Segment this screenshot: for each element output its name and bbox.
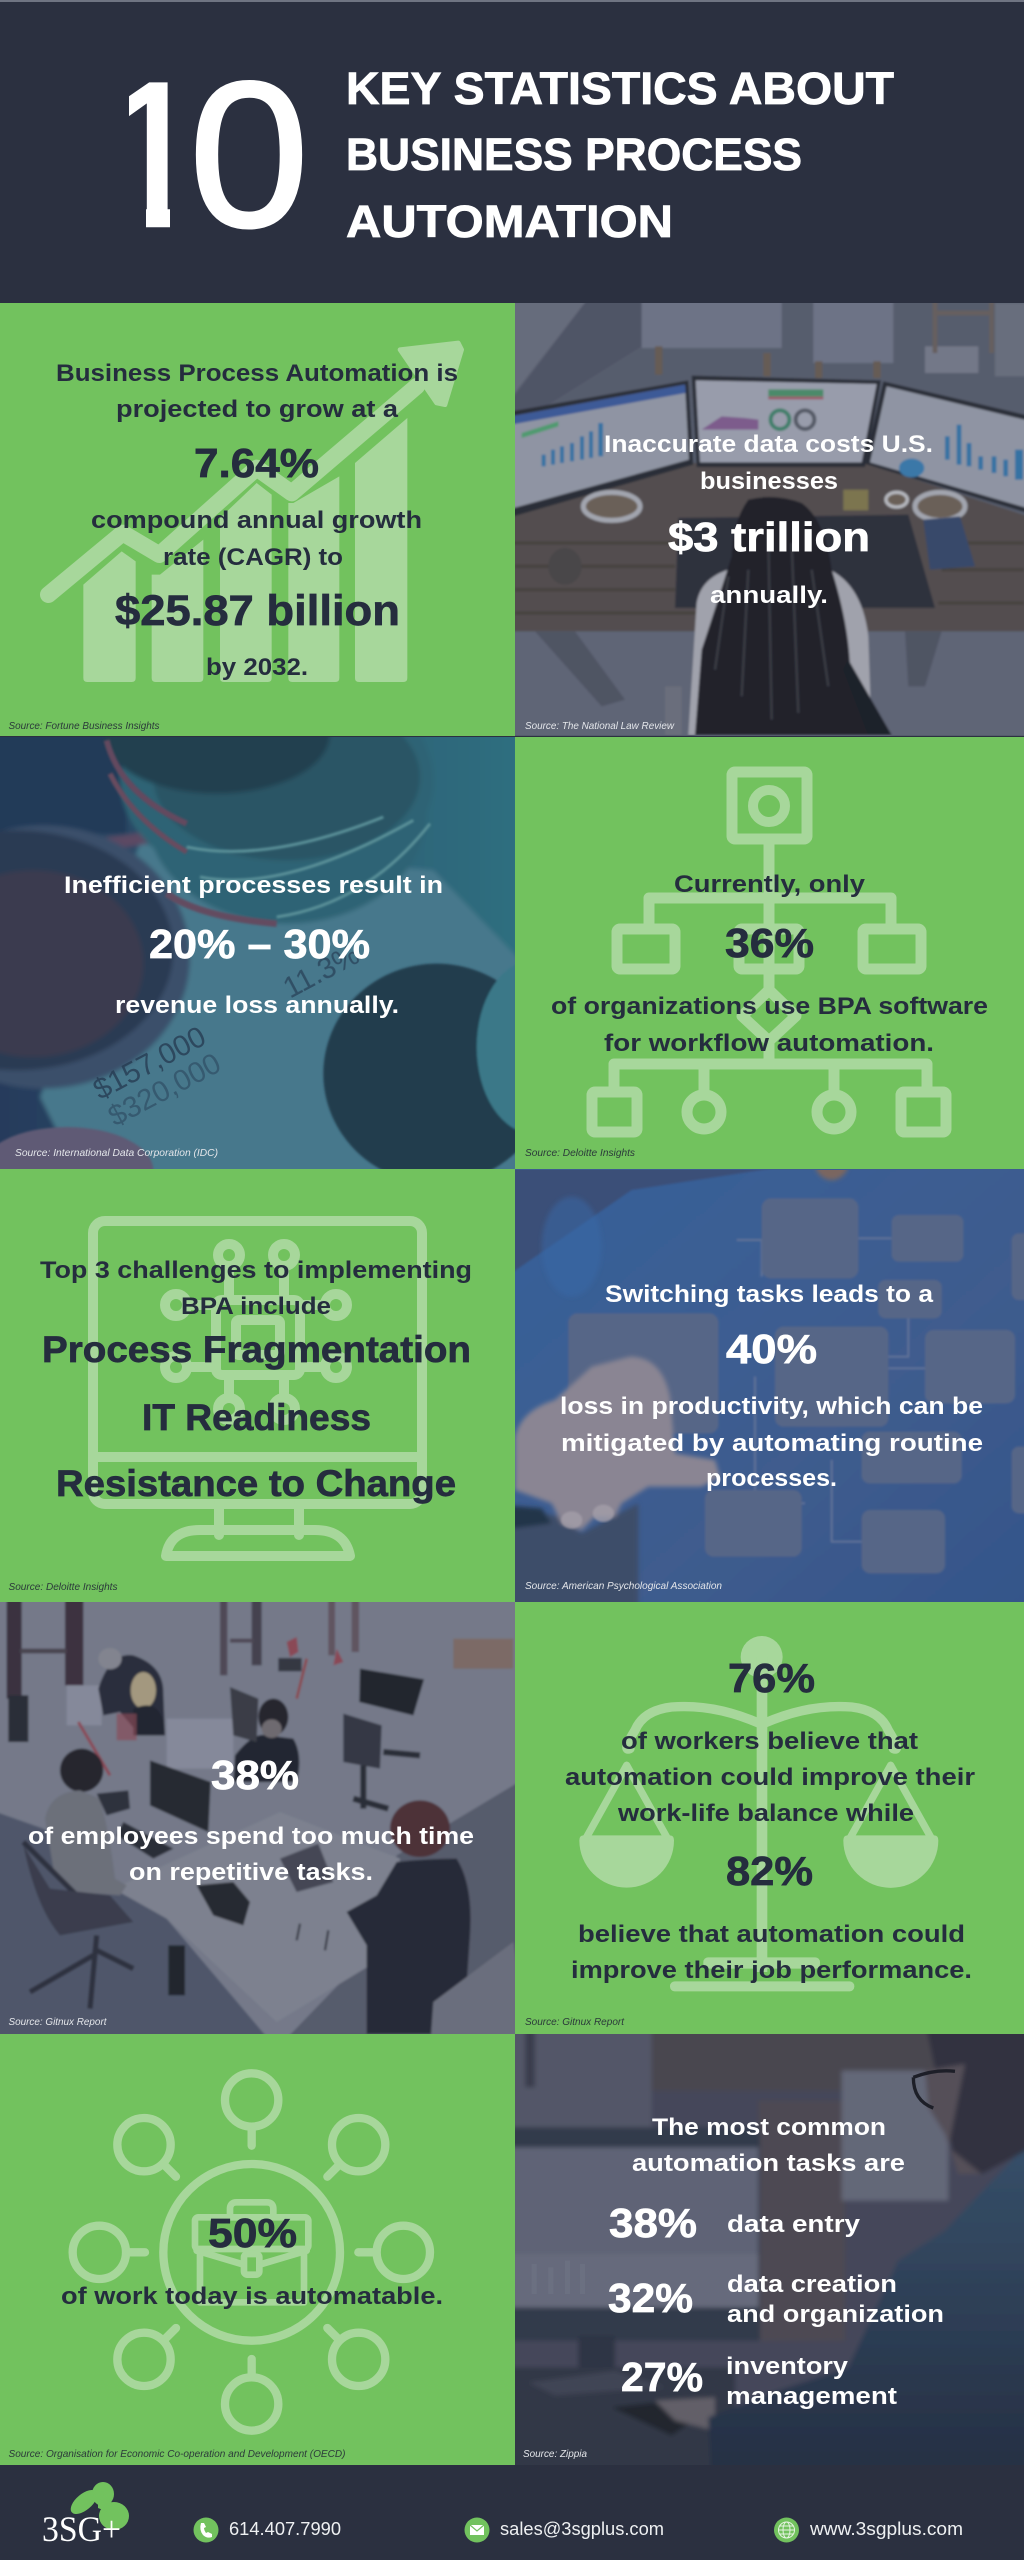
text: BPA software statistic: for workflow automation. <box>604 1030 934 1057</box>
text: inaccurate data statistic: annually. <box>710 582 828 609</box>
source: Source: Deloitte Insights <box>525 1147 636 1159</box>
row: inventory management: management <box>726 2383 897 2410</box>
text: work-life balance statistics: automation could improve their <box>565 1764 975 1791</box>
source: Source: Gitnux Report <box>8 2016 108 2028</box>
text: automatable work statistic: of work today is automatable. <box>61 2283 443 2310</box>
text: automation tasks intro <box>632 2114 905 2177</box>
text: work-life balance statistics: believe that automation could <box>578 1921 965 1948</box>
text: work-life balance statistics: 82% <box>726 1848 813 1894</box>
text: revenue loss statistic: Inefficient processes result in <box>64 872 443 899</box>
panel: BPA software <box>515 737 1024 1169</box>
row: data creation and organization: 32% <box>608 2275 693 2321</box>
text: challenges list: IT Readiness <box>142 1397 371 1438</box>
panel: inaccurate data <box>502 290 1024 750</box>
text: market growth statistic: compound annual growth <box>91 507 422 534</box>
logo: 3SG+ <box>42 2482 129 2549</box>
text: inaccurate data statistic: businesses <box>700 468 838 495</box>
photo: man at a computer <box>502 2021 1024 2481</box>
big number 10: 0 <box>189 39 309 270</box>
text: market growth statistic: $25.87 billion <box>115 587 400 635</box>
text: task switching statistic <box>560 1281 983 1492</box>
text: challenges list: Resistance to Change <box>56 1463 456 1504</box>
source: Source: The National Law Review <box>525 720 675 732</box>
text: market growth statistic: by 2032. <box>206 654 308 681</box>
icon: workflow diagram <box>592 772 946 1132</box>
source: Source: International Data Corporation (IDC) <box>15 1147 218 1159</box>
photo: coins on financial paper <box>0 737 515 1169</box>
title <box>346 63 894 247</box>
row: data entry <box>609 2200 861 2246</box>
text: BPA software statistic: of organizations use BPA software <box>551 993 988 1020</box>
text: market growth statistic: rate (CAGR) to <box>163 544 343 571</box>
contact: phone <box>194 2518 341 2542</box>
text: BPA software statistic <box>551 871 988 1057</box>
text: challenges list <box>40 1257 472 1504</box>
text: automatable work statistic: 50% <box>208 2210 297 2256</box>
text: work-life balance statistics: of workers believe that <box>621 1728 918 1755</box>
text: automation tasks intro: The most common <box>652 2114 886 2141</box>
text: automatable work statistic <box>61 2210 443 2310</box>
text: work-life balance statistics: improve their job performance. <box>571 1957 972 1984</box>
big number 10 <box>129 80 302 230</box>
text: work-life balance statistics <box>565 1655 975 1984</box>
icon: globe <box>774 2518 799 2542</box>
text: revenue loss statistic: revenue loss annually. <box>115 992 399 1019</box>
title: BUSINESS PROCESS <box>346 129 802 180</box>
panel: top 3 challenges <box>0 1169 515 1602</box>
text: revenue loss statistic: 20% – 30% <box>149 921 370 967</box>
source: Source: Deloitte Insights <box>8 1581 118 1593</box>
photo: coins on financial paper: 11.3% <box>278 938 365 1005</box>
text: task switching statistic: Switching tasks leads to a <box>605 1281 934 1308</box>
text: task switching statistic: mitigated by automating routine <box>561 1430 983 1457</box>
text: inaccurate data statistic: $3 trillion <box>668 514 870 560</box>
row: data entry: 38% <box>609 2200 697 2246</box>
header panel <box>0 0 1024 238</box>
source: Source: Fortune Business Insights <box>8 720 160 732</box>
text: market growth statistic <box>56 360 458 681</box>
photo: open-plan office <box>0 1589 530 2049</box>
icon: growth chart with arrow <box>48 343 462 682</box>
photo: desk with three monitors <box>502 290 1024 750</box>
row: inventory management: 27% <box>621 2354 703 2400</box>
contact: website: www.3sgplus.com <box>809 2519 963 2539</box>
panel: task switching <box>515 1169 1024 1602</box>
icon: briefcase in circle with satellite nodes <box>73 2073 430 2431</box>
text: repetitive tasks statistic: on repetitive tasks. <box>129 1859 373 1886</box>
text: inaccurate data statistic: Inaccurate data costs U.S. <box>604 431 933 458</box>
text: work-life balance statistics: 76% <box>728 1655 815 1701</box>
row: data creation and organization <box>608 2271 944 2328</box>
row: data entry: data entry <box>727 2211 861 2238</box>
contact: email: sales@3sgplus.com <box>500 2519 664 2539</box>
text: inaccurate data statistic <box>604 431 933 609</box>
source: Source: Zippia <box>523 2448 587 2460</box>
contact: email <box>464 2518 664 2542</box>
text: repetitive tasks statistic <box>28 1752 474 1886</box>
row: data creation and organization: data creation <box>727 2271 897 2298</box>
row: inventory management <box>621 2353 897 2410</box>
text: repetitive tasks statistic: of employees spend too much time <box>28 1823 474 1850</box>
text: task switching statistic: processes. <box>706 1465 837 1492</box>
big number 10: 1 <box>96 39 211 270</box>
text: challenges list: Top 3 challenges to implementing <box>40 1257 472 1284</box>
icon: monitor with circuit chip <box>93 1221 422 1556</box>
text: task switching statistic: loss in productivity, which can be <box>560 1393 983 1420</box>
text: challenges list: BPA include <box>181 1293 331 1320</box>
text: revenue loss statistic <box>64 872 443 1019</box>
text: BPA software statistic: 36% <box>725 920 814 966</box>
icon: envelope <box>464 2518 490 2542</box>
contact: website <box>774 2518 963 2542</box>
panel: automatable work <box>0 2034 515 2465</box>
logo: 3SG+: 3SG+ <box>42 2509 121 2549</box>
icon: balance scale <box>579 1636 938 1991</box>
panel: common automation tasks <box>502 2021 1024 2481</box>
source: Source: American Psychological Association <box>525 1580 722 1592</box>
panel: repetitive tasks <box>0 1589 530 2049</box>
photo: coins on financial paper: $157,000 <box>88 1020 211 1107</box>
photo: hand touching virtual flowchart <box>515 1170 1024 1602</box>
panel: market growth <box>0 303 515 736</box>
text: market growth statistic: Business Process Automation is <box>56 360 458 387</box>
row: inventory management: inventory <box>726 2353 849 2380</box>
text: task switching statistic: 40% <box>726 1326 817 1372</box>
text: BPA software statistic: Currently, only <box>674 871 866 898</box>
title: AUTOMATION <box>346 196 673 247</box>
source: Source: Gitnux Report <box>525 2016 625 2028</box>
text: market growth statistic: projected to grow at a <box>116 396 399 423</box>
footer <box>0 2465 1024 2560</box>
row: data creation and organization: and organization <box>727 2301 944 2328</box>
photo: coins on financial paper: $320,000 <box>103 1047 226 1133</box>
text: automation tasks intro: automation tasks are <box>632 2150 905 2177</box>
text: repetitive tasks statistic: 38% <box>211 1752 299 1798</box>
contact: phone: 614.407.7990 <box>229 2519 341 2539</box>
source: Source: Organisation for Economic Co-operation and Development (OECD) <box>8 2448 346 2460</box>
title: KEY STATISTICS ABOUT <box>346 63 894 114</box>
icon: phone <box>194 2518 218 2542</box>
text: market growth statistic: 7.64% <box>194 440 319 486</box>
text: work-life balance statistics: work-life balance while <box>617 1800 914 1827</box>
panel: revenue loss <box>0 737 515 1169</box>
panel: work-life balance <box>515 1602 1024 2034</box>
text: challenges list: Process Fragmentation <box>42 1329 471 1370</box>
